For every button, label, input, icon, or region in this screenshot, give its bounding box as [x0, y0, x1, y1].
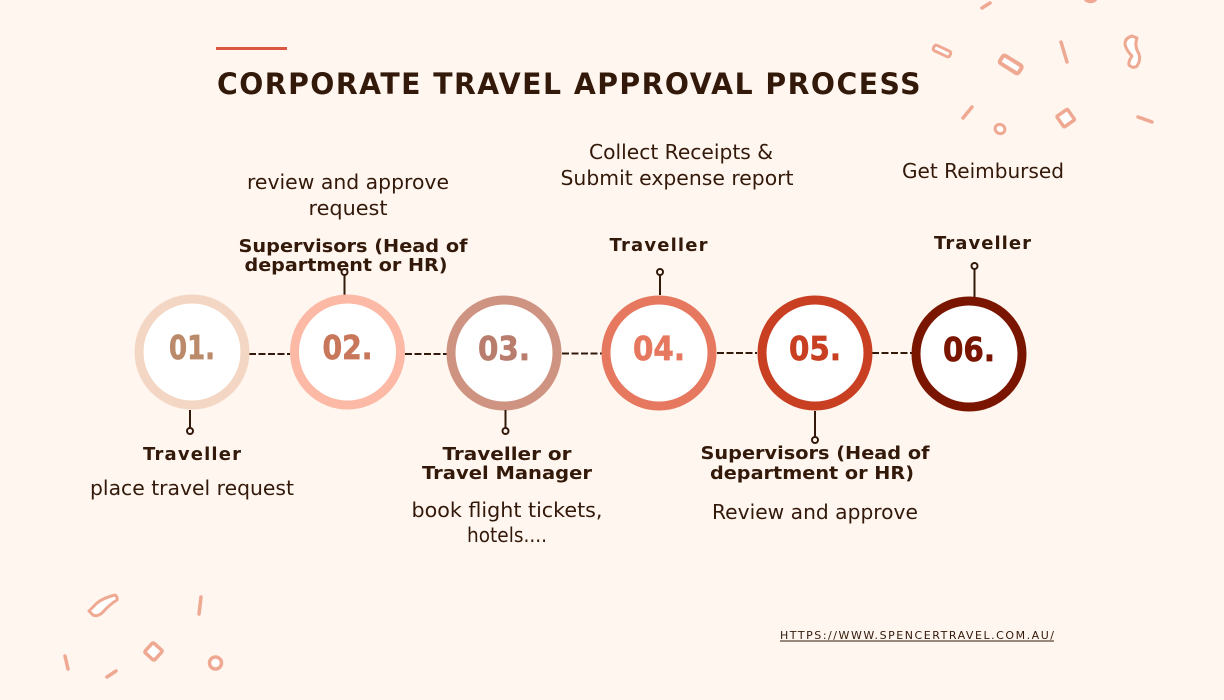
website link: HTTPS://WWW.SPENCERTRAVEL.COM.AU/ [780, 629, 1054, 642]
step 02: department or HR) [244, 255, 448, 276]
step 04: 04. [633, 329, 685, 368]
step 06: 06. [943, 330, 995, 369]
step 02: 02. [322, 328, 372, 367]
step 04: Submit expense report [560, 166, 794, 190]
decorative confetti: bottom left [65, 595, 222, 677]
title accent line [216, 47, 287, 50]
step 03: Traveller or [442, 444, 572, 465]
step 02: Supervisors (Head of [238, 236, 468, 257]
step 02 [238, 170, 468, 405]
dashed connector between steps [249, 353, 912, 354]
decorative confetti: top right [933, 0, 1152, 135]
step 03: hotels.... [467, 523, 547, 547]
step 01: place travel request [90, 476, 294, 500]
step 06: Traveller [934, 233, 1031, 254]
step 03 [412, 300, 602, 547]
step 01 [90, 299, 294, 500]
step 06 [902, 159, 1064, 407]
step 04: Collect Receipts & [589, 140, 773, 164]
step 05: Review and approve [712, 500, 918, 524]
step 02: request [308, 196, 388, 220]
step 01: Traveller [143, 444, 241, 465]
step 05 [700, 300, 930, 524]
title: CORPORATE TRAVEL APPROVAL PROCESS [217, 67, 922, 101]
step 06: Get Reimbursed [902, 159, 1064, 183]
step 01: 01. [169, 328, 215, 367]
step 05: Supervisors (Head of [700, 443, 930, 464]
step 04 [560, 140, 794, 406]
step 05: department or HR) [710, 463, 914, 484]
step 05: 05. [789, 329, 841, 368]
step 04: Traveller [610, 235, 708, 256]
step 03: 03. [478, 329, 530, 368]
step 03: Travel Manager [422, 463, 592, 484]
step 02: review and approve [247, 170, 449, 194]
step 03: book flight tickets, [412, 498, 602, 522]
